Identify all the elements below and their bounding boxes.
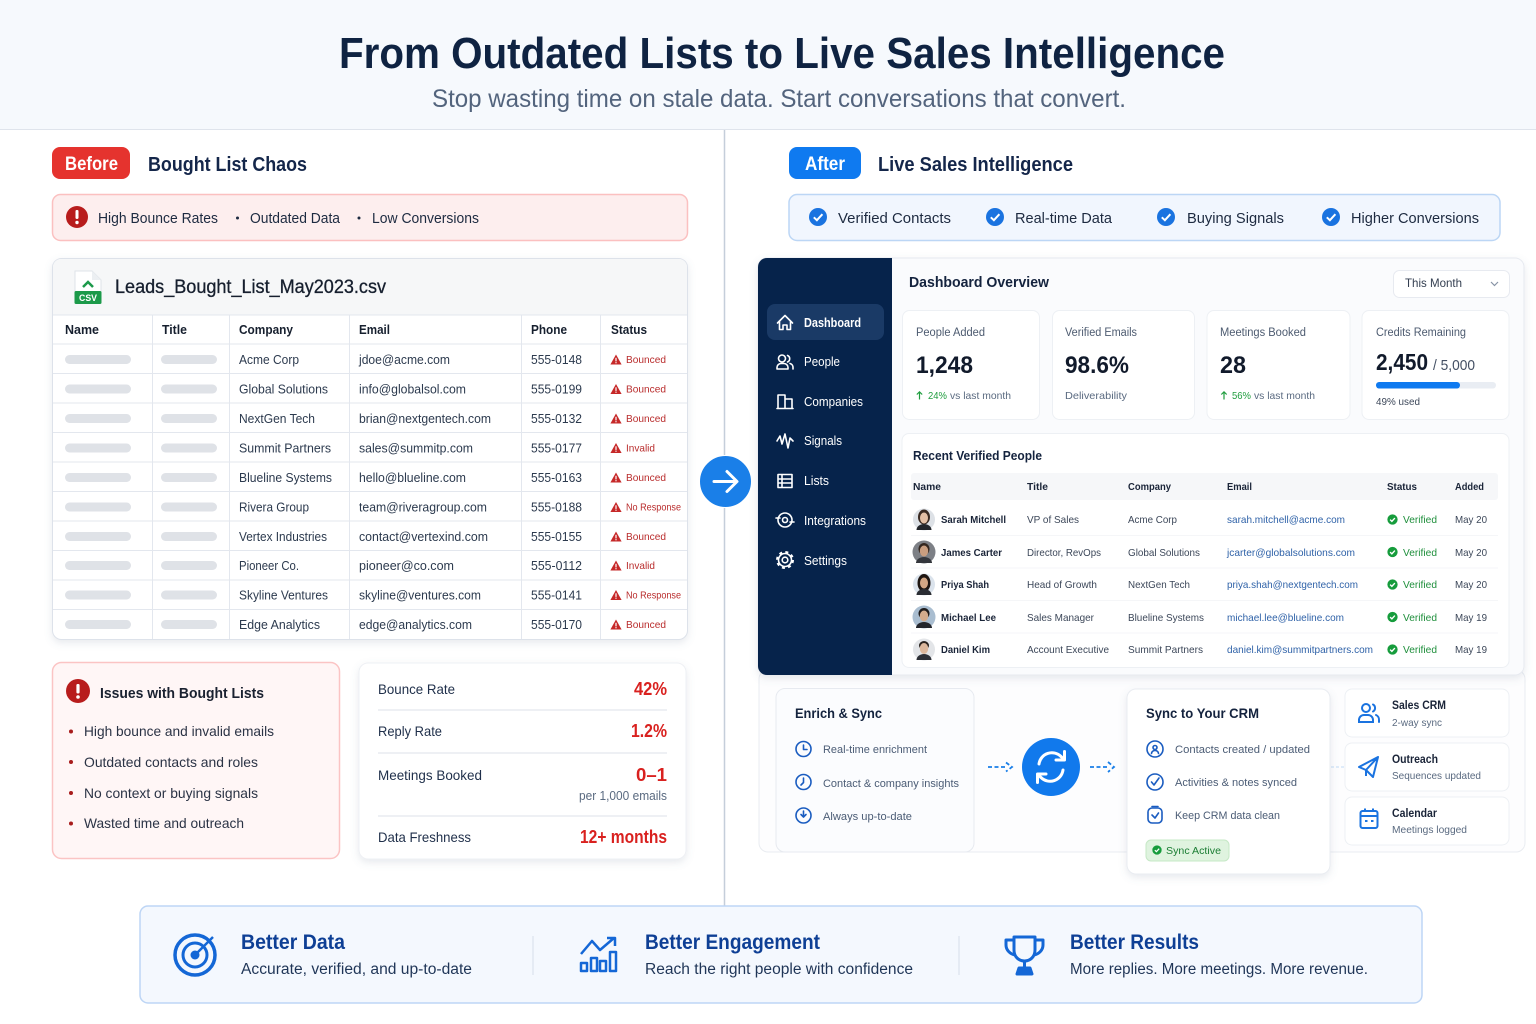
panel: bottom benefits banner — [140, 906, 1422, 1003]
panel: sync to your crm: Contacts created / updated — [1175, 744, 1310, 756]
row: Sarah Mitchell: Acme Corp — [1128, 514, 1177, 526]
stat card: people added: vs last month — [950, 390, 1011, 402]
row: Michael Lee: Verified — [1403, 612, 1437, 624]
dashboard heading: Dashboard Overview — [909, 274, 1049, 291]
table header: Title — [162, 322, 187, 337]
row: NextGen Tech: Bounced — [626, 413, 666, 425]
row: Priya Shah: Priya Shah — [941, 579, 989, 591]
after badge — [789, 147, 861, 179]
stat card: credits remaining: / 5,000 — [1433, 357, 1475, 374]
icon: target — [175, 935, 215, 975]
stat card: verified emails: 98.6% — [1065, 352, 1129, 379]
stat card: verified emails — [1052, 310, 1194, 420]
benefit: better data: Accurate, verified, and up-to-date — [241, 961, 472, 978]
row: Priya Shah: Head of Growth — [1027, 579, 1097, 591]
stat card: credits remaining: 49% used — [1376, 396, 1420, 408]
card: sales crm: 2-way sync — [1392, 717, 1442, 729]
benefit: better data — [241, 931, 472, 978]
people table header: Status — [1387, 481, 1417, 493]
stat card: verified emails: Deliverability — [1065, 390, 1128, 402]
row: Michael Lee: Blueline Systems — [1128, 612, 1204, 624]
benefit: better results: More replies. More meetings. More revenue. — [1070, 961, 1368, 978]
people table header: Name — [913, 481, 941, 493]
alert bar: problems: Outdated Data — [250, 211, 341, 227]
row: James Carter: Director, RevOps — [1027, 547, 1101, 559]
row: Acme Corp — [65, 352, 666, 367]
card: sales crm — [1345, 689, 1509, 737]
row: Global Solutions: Bounced — [626, 384, 666, 396]
card: sales crm: Sales CRM — [1392, 700, 1446, 712]
icon: csv file: CSV — [79, 293, 97, 303]
row: James Carter — [912, 540, 1487, 564]
panel: bought list stats: Bounce Rate — [378, 681, 455, 697]
benefit bar: Buying Signals — [1187, 211, 1284, 227]
alert bar: problems: High Bounce Rates — [98, 211, 218, 227]
panel: bought list stats: 12+ months — [580, 827, 667, 847]
sidebar — [758, 258, 892, 675]
row: Acme Corp: 555-0148 — [531, 352, 582, 367]
panel: sync to your crm — [1127, 689, 1330, 874]
after badge: After — [805, 154, 846, 175]
row: NextGen Tech — [65, 411, 666, 426]
panel: bought list stats: 0–1 — [636, 765, 667, 785]
sidebar: Signals — [804, 434, 842, 448]
sidebar: Settings — [804, 554, 847, 568]
row: Summit Partners: Summit Partners — [239, 440, 331, 456]
row: Skyline Ventures: skyline@ventures.com — [359, 588, 481, 602]
sidebar: Dashboard — [804, 316, 861, 330]
benefit: better engagement: Better Engagement — [645, 931, 820, 954]
row: Michael Lee: Sales Manager — [1027, 612, 1094, 624]
panel: recent verified people — [902, 434, 1509, 668]
sync active badge — [1146, 840, 1229, 861]
card: outreach: Outreach — [1392, 754, 1438, 766]
panel: bought list stats: 1.2% — [631, 721, 667, 741]
panel: dashboard — [758, 258, 1524, 675]
stat card: verified emails: Verified Emails — [1065, 327, 1137, 339]
row: Skyline Ventures: 555-0141 — [531, 588, 582, 602]
panel: issues with bought lists: Outdated contacts and roles — [84, 754, 258, 770]
row: Daniel Kim: Account Executive — [1027, 644, 1109, 656]
sync active badge: Sync Active — [1166, 845, 1221, 857]
panel: enrich and sync: Always up-to-date — [823, 811, 912, 823]
row: James Carter: Global Solutions — [1128, 547, 1200, 559]
month dropdown: This Month — [1405, 276, 1462, 290]
panel: enrich and sync: Real-time enrichment — [823, 744, 927, 756]
benefit: better data: Better Data — [241, 931, 345, 954]
panel: enrich and sync: Contact & company insights — [823, 778, 959, 790]
panel: issues with bought lists: Issues with Bought Lists — [100, 685, 264, 702]
header band — [0, 0, 1536, 130]
row: James Carter: James Carter — [941, 547, 1002, 559]
row: James Carter: jcarter@globalsolutions.com — [1226, 547, 1355, 559]
benefit bar: Higher Conversions — [1351, 211, 1479, 227]
panel: bought list stats: Meetings Booked — [378, 767, 482, 783]
panel: sync to your crm: Keep CRM data clean — [1175, 810, 1280, 822]
alert bar: problems — [52, 194, 688, 240]
panel: csv table — [52, 258, 688, 640]
benefit bar — [789, 194, 1500, 240]
row: Pioneer Co.: Pioneer Co. — [239, 558, 299, 573]
panel: recent verified people: Recent Verified People — [913, 448, 1042, 463]
panel: issues with bought lists: High bounce and invalid emails — [84, 723, 274, 739]
table header: Status — [611, 322, 647, 337]
row: NextGen Tech: brian@nextgentech.com — [359, 411, 491, 426]
row: Sarah Mitchell: VP of Sales — [1027, 514, 1079, 526]
row: Rivera Group — [65, 500, 681, 514]
stat card: credits remaining: Credits Remaining — [1376, 327, 1466, 339]
row: Acme Corp: jdoe@acme.com — [358, 352, 450, 367]
title: From Outdated Lists to Live Sales Intelligence — [339, 29, 1225, 78]
row: Blueline Systems: 555-0163 — [531, 470, 582, 485]
row: Vertex Industries: contact@vertexind.com — [359, 529, 488, 544]
row: Sarah Mitchell: May 20 — [1455, 514, 1487, 526]
sidebar: Companies — [804, 395, 863, 409]
row: James Carter: May 20 — [1455, 547, 1487, 559]
card: outreach: Sequences updated — [1392, 770, 1481, 782]
row: Priya Shah: Verified — [1403, 579, 1437, 591]
row: Summit Partners: 555-0177 — [531, 440, 582, 456]
sidebar: Integrations — [804, 514, 866, 528]
row: Skyline Ventures: No Response — [626, 590, 681, 602]
row: Pioneer Co.: pioneer@co.com — [359, 558, 454, 573]
subtitle: Stop wasting time on stale data. Start conversations that convert. — [432, 85, 1126, 113]
panel: issues with bought lists — [52, 662, 340, 858]
row: Blueline Systems: hello@blueline.com — [359, 470, 466, 485]
table header — [65, 322, 647, 337]
row: Global Solutions — [65, 382, 666, 396]
benefit: better engagement — [645, 931, 913, 978]
people table header: Title — [1027, 481, 1048, 493]
stat card: credits remaining — [1362, 310, 1509, 420]
benefit: better results — [1070, 931, 1368, 978]
row: Edge Analytics: 555-0170 — [531, 617, 582, 632]
people table header: Company — [1128, 481, 1171, 493]
row: Acme Corp: Bounced — [626, 354, 666, 366]
table header: Name — [65, 322, 99, 337]
stat card: people added — [902, 310, 1040, 420]
row: Rivera Group: team@riveragroup.com — [359, 500, 487, 514]
month dropdown — [1394, 270, 1510, 298]
row: Skyline Ventures: Skyline Ventures — [239, 588, 328, 602]
row: Daniel Kim: daniel.kim@summitpartners.com — [1227, 644, 1373, 656]
row: Global Solutions: info@globalsol.com — [359, 382, 466, 396]
before heading: Bought List Chaos — [148, 154, 307, 176]
panel: sync to your crm: Sync to Your CRM — [1146, 705, 1259, 721]
row: Priya Shah — [913, 574, 1487, 596]
arrow: sync to crm — [1090, 762, 1114, 772]
card: outreach — [1345, 743, 1509, 791]
row: Sarah Mitchell: Sarah Mitchell — [941, 514, 1006, 526]
row: Global Solutions: Global Solutions — [239, 382, 328, 396]
row: NextGen Tech: NextGen Tech — [239, 411, 315, 426]
icon: csv file — [74, 271, 102, 304]
arrow: enrich to sync — [988, 762, 1012, 772]
stat card: meetings booked: Meetings Booked — [1220, 327, 1306, 339]
row: Summit Partners: Invalid — [626, 442, 655, 454]
row: Summit Partners: sales@summitp.com — [359, 440, 473, 456]
people table header: Email — [1227, 481, 1252, 493]
before badge — [52, 147, 130, 179]
row: Blueline Systems: Blueline Systems — [239, 470, 332, 485]
benefit: better engagement: Reach the right people with confidence — [645, 961, 913, 978]
icon: sync circle — [1022, 738, 1080, 796]
row: Pioneer Co.: 555-0112 — [531, 558, 582, 573]
stat card: meetings booked: vs last month — [1254, 390, 1315, 402]
row: Michael Lee: Michael Lee — [941, 612, 996, 624]
after heading: Live Sales Intelligence — [878, 154, 1073, 176]
row: Daniel Kim: May 19 — [1455, 644, 1487, 656]
row: Pioneer Co. — [65, 558, 655, 573]
stat card: credits remaining: 2,450 — [1376, 349, 1428, 375]
before badge: Before — [65, 154, 118, 175]
stat card: people added: 1,248 — [916, 352, 973, 379]
row: Sarah Mitchell — [913, 508, 1487, 530]
icon: growth chart — [581, 938, 616, 971]
row: Vertex Industries: Bounced — [626, 531, 666, 543]
benefit bar: Verified Contacts — [838, 211, 951, 227]
stat card: people added: People Added — [916, 327, 985, 339]
row: NextGen Tech: 555-0132 — [531, 411, 582, 426]
table header: Phone — [531, 322, 567, 337]
arrow: before to after — [700, 456, 752, 508]
benefit: better results: Better Results — [1070, 931, 1199, 954]
icon: trophy — [1006, 937, 1043, 974]
row: Edge Analytics: Bounced — [626, 619, 666, 631]
file name: Leads_Bought_List_May2023.csv — [115, 277, 386, 298]
row: Michael Lee — [912, 606, 1487, 628]
row: Rivera Group: Rivera Group — [239, 500, 309, 514]
row: Sarah Mitchell: Verified — [1403, 514, 1437, 526]
stat card: meetings booked — [1207, 310, 1350, 420]
row: Priya Shah: NextGen Tech — [1128, 579, 1190, 591]
row: Blueline Systems: Bounced — [626, 472, 666, 484]
row: Daniel Kim — [913, 638, 1487, 660]
panel: bought list stats: Reply Rate — [378, 723, 442, 739]
card: calendar — [1345, 797, 1509, 845]
row: Priya Shah: May 20 — [1455, 579, 1487, 591]
row: Rivera Group: No Response — [626, 502, 681, 514]
row: Rivera Group: 555-0188 — [531, 500, 582, 514]
row: Priya Shah: priya.shah@nextgentech.com — [1227, 579, 1358, 591]
benefit bar: Real-time Data — [1015, 211, 1113, 227]
panel: bought list stats: 42% — [634, 679, 667, 699]
row: Michael Lee: michael.lee@blueline.com — [1227, 612, 1344, 624]
card: calendar: Calendar — [1392, 808, 1437, 820]
panel: enrich and sync backdrop — [759, 670, 1525, 852]
row: Global Solutions: 555-0199 — [531, 382, 582, 396]
panel: bought list stats: per 1,000 emails — [579, 789, 667, 803]
stat card: meetings booked: 56% — [1232, 390, 1251, 402]
sidebar: Lists — [804, 474, 829, 488]
row: Vertex Industries: Vertex Industries — [239, 529, 327, 544]
panel: issues with bought lists: No context or buying signals — [84, 785, 258, 801]
row: Edge Analytics: edge@analytics.com — [359, 617, 472, 632]
row: Summit Partners — [65, 440, 655, 456]
row: Skyline Ventures — [65, 588, 681, 602]
row: Daniel Kim: Summit Partners — [1128, 644, 1203, 656]
panel: after — [758, 147, 1525, 874]
row: Edge Analytics: Edge Analytics — [239, 617, 320, 632]
panel: sync to your crm: Activities & notes synced — [1175, 777, 1297, 789]
row: James Carter: Verified — [1403, 547, 1437, 559]
panel: enrich and sync — [776, 688, 974, 852]
row: Michael Lee: May 19 — [1455, 612, 1487, 624]
row: Vertex Industries: 555-0155 — [531, 529, 582, 544]
row: Vertex Industries — [65, 529, 666, 544]
row: Blueline Systems — [65, 470, 666, 485]
stat card: people added: 24% — [928, 390, 947, 402]
row: Sarah Mitchell: sarah.mitchell@acme.com — [1227, 514, 1345, 526]
card: calendar: Meetings logged — [1392, 824, 1467, 836]
panel: issues with bought lists: Wasted time and outreach — [84, 815, 244, 831]
panel: before — [52, 147, 688, 859]
people table header: Added — [1455, 481, 1484, 493]
row: Pioneer Co.: Invalid — [626, 560, 655, 572]
sidebar: People — [804, 355, 840, 369]
row: Acme Corp: Acme Corp — [239, 352, 299, 367]
row: Daniel Kim: Verified — [1403, 644, 1437, 656]
alert bar: problems: Low Conversions — [372, 211, 479, 227]
people table header — [911, 473, 1498, 500]
table header: Email — [359, 322, 390, 337]
row: Daniel Kim: Daniel Kim — [941, 644, 990, 656]
panel: bought list stats — [359, 663, 686, 859]
table header: Company — [239, 322, 294, 337]
row: Edge Analytics — [65, 617, 666, 632]
panel: enrich and sync: Enrich & Sync — [795, 705, 882, 721]
panel: bought list stats: Data Freshness — [378, 829, 471, 845]
stat card: meetings booked: 28 — [1220, 352, 1246, 379]
